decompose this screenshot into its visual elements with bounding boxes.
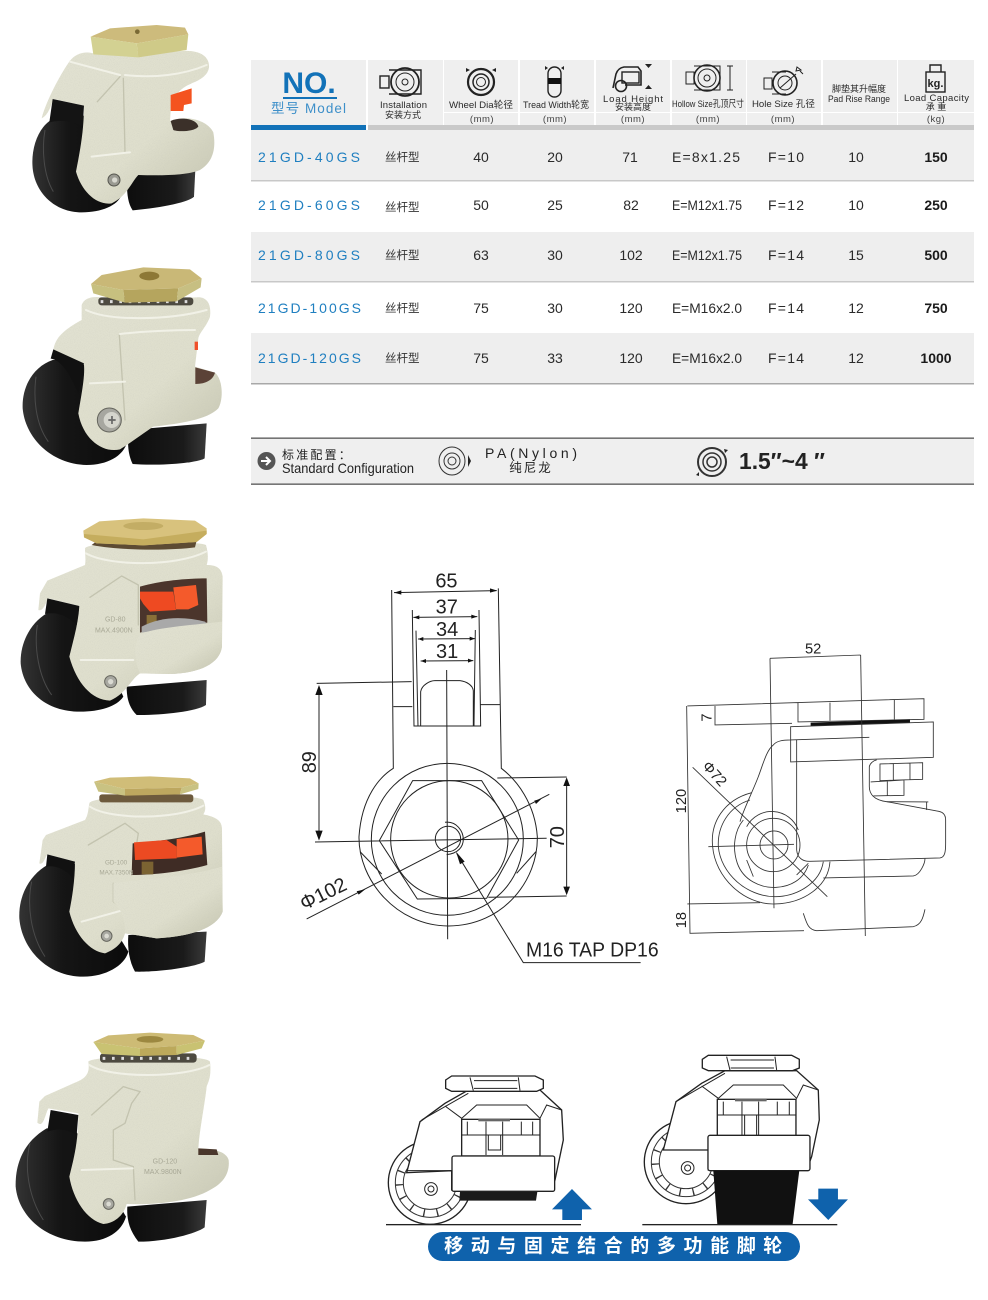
model heading [271,67,346,116]
model heading: 型号 Model [271,101,346,116]
ground line [642,1224,837,1225]
row 21GD-40GS: 20 [547,149,563,165]
row 21GD-120GS: E=M16x2.0 [672,350,742,366]
screw [103,1199,114,1209]
casting mark: GD-80 [105,617,126,624]
caster outline [687,699,946,931]
material label: 纯尼龙 [509,461,553,475]
dimension labels: 65 [435,570,458,592]
row 21GD-100GS: E=M16x2.0 [672,300,742,316]
dimension labels: 34 [436,619,458,641]
row 21GD-80GS: 63 [473,247,489,263]
row 21GD-40GS [258,149,948,165]
size range: 1.5″~4 ″ [739,448,825,474]
wheel [32,115,122,212]
column: tread width: Tread Width轮宽 [523,99,589,111]
row 21GD-60GS: 21GD-60GS [258,197,360,213]
dimension labels: Φ102 [297,874,350,915]
dimension labels: Φ72 [699,759,729,790]
foot [127,680,207,715]
column: installation: Installation [380,100,427,111]
column: load capacity: (kg) [927,114,945,125]
row 21GD-80GS: 30 [547,247,563,263]
column: hollow size [672,65,744,125]
column: hole size: Hole Size 孔径 [752,98,815,110]
row 21GD-120GS: 33 [547,350,563,366]
column: load capacity: Load Capacity [904,93,969,104]
row 21GD-100GS: 12 [848,300,864,316]
row 21GD-100GS: 120 [619,300,643,316]
column: load height: (mm) [621,114,645,125]
wheel [23,360,127,465]
banner: multifunction caster slogan [428,1232,800,1261]
row 21GD-120GS [258,350,952,366]
housing [663,1071,819,1224]
red knob [171,88,192,111]
row 21GD-40GS: 21GD-40GS [258,149,360,165]
column: tread width [523,66,589,125]
ground line [386,1224,581,1225]
configuration label: Standard Configuration [282,460,414,476]
housing [407,1090,563,1201]
row 21GD-80GS: 102 [619,247,643,263]
notch [171,119,198,131]
row 21GD-60GS: 25 [547,197,563,213]
dimension labels: M16 TAP DP16 [526,940,659,962]
casting mark [99,859,134,876]
row 21GD-80GS: 21GD-80GS [258,247,360,263]
row 21GD-100GS: 30 [547,300,563,316]
bearing balls [100,1053,197,1063]
foot [128,932,207,972]
wheel [644,1120,728,1204]
dimension labels: 18 [674,912,690,928]
spec table rows [251,130,974,384]
notch [198,1148,218,1155]
caster photo 4: 21GD-100GS [19,776,223,977]
function diagram: wheel mode raised [386,1076,592,1225]
body [39,796,223,953]
configuration label: 标准配置： [282,448,353,462]
bracket window [49,99,84,127]
row 21GD-80GS: 15 [848,247,864,263]
lower band [113,867,223,938]
dimension labels: 52 [805,641,821,657]
foot [128,423,207,465]
row 21GD-100GS: 21GD-100GS [258,300,361,316]
row 21GD-100GS: 75 [473,300,489,316]
technical drawing: front view [297,570,659,963]
caster photo 5: 21GD-120GS [16,1033,229,1242]
top plate [93,1033,205,1056]
technical drawing: side view [674,641,946,936]
fork outline [359,588,537,926]
screw [101,931,112,941]
dimension labels [674,641,821,928]
casting mark: MAX.4900N [95,628,133,635]
wheel [388,1141,472,1224]
row 21GD-60GS [258,197,948,214]
row 21GD-40GS: 丝杆型 [385,150,420,164]
column: load capacity: 承 重 [926,101,946,112]
model heading: NO. [282,67,336,100]
top plate [83,518,207,550]
dimension labels: 89 [299,751,321,773]
column: wheel diameter [449,68,514,125]
caster photo 1: 21GD-40GS [32,25,214,212]
column: installation: 安装方式 [385,109,421,120]
column: pad rise range [828,83,890,105]
row 21GD-40GS: 10 [848,149,864,165]
black foot [713,1171,799,1224]
row 21GD-40GS: 71 [622,149,638,165]
casting mark: GD-100 [105,859,128,866]
window [46,854,75,878]
column: installation [380,68,427,120]
wheel rings [712,793,830,904]
screw [108,174,120,186]
row 21GD-100GS: 750 [924,300,948,316]
row 21GD-120GS: 1000 [920,350,952,366]
dimension labels [297,570,659,962]
plate nut [702,1055,799,1071]
casting mark [95,617,133,635]
dimension lines [315,588,641,963]
window [47,1110,78,1135]
screw [105,676,117,688]
column: pad rise range: Pad Rise Range [828,94,890,105]
row 21GD-80GS: 丝杆型 [385,248,420,262]
row 21GD-100GS: F=14 [768,300,804,316]
knob [134,837,203,874]
caster photo 3: 21GD-80GS [21,518,223,715]
row 21GD-60GS: F=12 [768,197,804,213]
column: hole size: (mm) [771,114,795,125]
foot [127,1200,207,1242]
column: load height: Load Height [603,94,663,105]
row 21GD-120GS: 丝杆型 [385,351,420,365]
material label: PA(Nylon) [485,445,577,461]
column: load capacity: kg. [928,78,943,90]
window [45,598,79,625]
wheel [19,862,128,977]
column: load height: 安装高度 [615,101,651,112]
top plate [94,776,199,796]
body [37,1056,229,1224]
row 21GD-40GS: 150 [924,149,948,165]
wheel [21,607,123,712]
screw [97,408,121,432]
row 21GD-40GS: E=8x1.25 [672,149,740,165]
red knob window [140,578,207,633]
icon: down arrow [808,1189,848,1220]
foot [127,170,195,210]
icon: swivel wheel [696,448,728,476]
column: wheel diameter: (mm) [470,114,494,125]
row 21GD-60GS: 82 [623,197,639,213]
row 21GD-100GS: 丝杆型 [385,301,420,315]
dimension labels: 7 [700,714,716,722]
row 21GD-120GS: 21GD-120GS [258,350,361,366]
row 21GD-80GS: E=M12x1.75 [672,247,742,263]
plate nut [446,1076,543,1091]
top plate [91,267,202,303]
column: pad rise range: 脚垫其升幅度 [832,83,886,94]
row 21GD-60GS: 250 [924,197,948,213]
dimension labels: 31 [436,641,458,663]
row 21GD-120GS: 120 [619,350,643,366]
wheel and hex [307,670,549,939]
dimension lines [687,655,865,936]
row 21GD-60GS: 50 [473,197,489,213]
row 21GD-60GS: 10 [848,197,864,213]
spec table header [251,60,974,130]
knob window [132,832,207,875]
column: tread width: (mm) [543,114,567,125]
column: wheel diameter: Wheel Dia轮径 [449,99,514,111]
row 21GD-60GS: E=M12x1.75 [672,197,742,213]
red dot [195,342,198,350]
body [38,542,223,701]
material label [485,445,577,475]
wheel [16,1127,126,1242]
icon: nylon wheel [439,447,471,475]
row 21GD-100GS [258,300,948,316]
column: load height [603,64,663,125]
banner: multifunction caster slogan: 移动与固定结合的多功能脚轮 [444,1234,790,1257]
casting mark: MAX.9800N [144,1169,182,1176]
casting mark: MAX.7350N [99,869,134,876]
column: hollow size: Hollow Size孔顶尺寸 [672,98,744,110]
row 21GD-40GS: F=10 [768,149,804,165]
bearing balls [98,297,193,305]
row 21GD-80GS [258,247,948,263]
configuration label [282,448,414,476]
row 21GD-80GS: F=14 [768,247,804,263]
column: load capacity [904,65,969,125]
row 21GD-120GS: F=14 [768,350,804,366]
top plate [91,25,188,57]
row 21GD-120GS: 12 [848,350,864,366]
body [53,297,222,450]
function diagram: foot mode lowered [642,1055,848,1225]
row 21GD-80GS: 500 [924,247,948,263]
knob [140,585,198,627]
row 21GD-40GS: 40 [473,149,489,165]
bearing balls [99,794,193,802]
window [51,349,84,393]
row 21GD-60GS: 丝杆型 [385,200,420,214]
icon: up arrow [552,1189,592,1220]
dimension labels: 70 [547,826,569,848]
lower band [135,622,222,674]
column: hole size [752,67,815,125]
dimension labels: 37 [436,596,458,618]
standard configuration bar [251,438,974,485]
caster photo 2: 21GD-60GS [23,267,222,465]
row 21GD-120GS: 75 [473,350,489,366]
casting mark: GD-120 [153,1158,177,1165]
column: hollow size: (mm) [696,114,720,125]
body [42,51,214,204]
casting mark [144,1158,182,1176]
notch [195,367,215,384]
icon: arrow bullet [258,452,276,470]
dimension labels: 120 [674,789,690,813]
